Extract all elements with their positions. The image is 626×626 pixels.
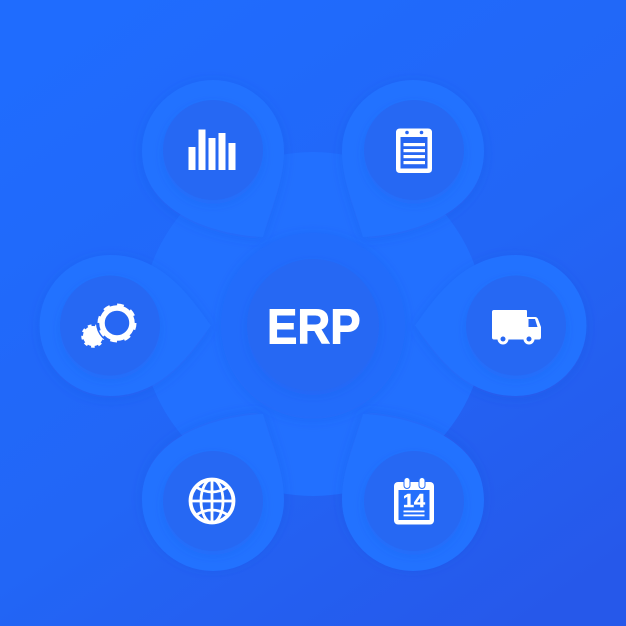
icon: gears [83,302,138,346]
drop: bottom right [342,414,484,571]
drop: bottom left [142,414,284,571]
central disc [141,152,485,496]
title: ERP: ERP [267,300,361,355]
icon: bar chart [188,130,236,170]
inner circle: top left [163,100,263,200]
icon: notepad [396,128,432,173]
icon: globe [190,480,234,522]
center circle [247,259,379,391]
inner circle: bottom left [163,451,263,551]
icon: calendar: 14 [403,491,425,511]
inner circle: right [466,276,566,376]
drop: top left [142,80,284,237]
icon: calendar [394,478,434,524]
inner circle: top right [364,100,464,200]
drop: left [40,255,211,396]
icon: truck [492,310,541,344]
drop: right [415,255,586,396]
center halo [221,233,405,417]
drop: top right [342,80,484,237]
inner circle: left [60,276,160,376]
inner circle: bottom right [364,451,464,551]
